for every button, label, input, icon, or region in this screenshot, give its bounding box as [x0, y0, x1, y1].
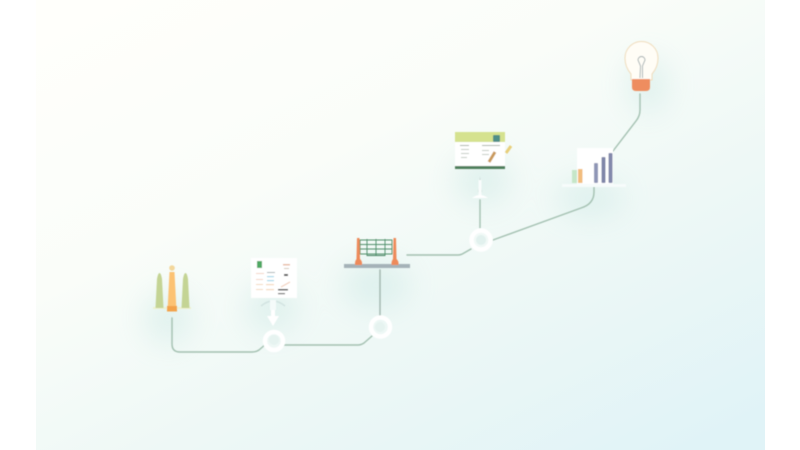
right pillar	[182, 273, 190, 308]
left pillar	[156, 273, 164, 308]
left post	[355, 238, 362, 265]
step 2: document board	[251, 258, 297, 298]
pencil	[489, 152, 495, 162]
shelf	[153, 307, 191, 309]
soft shadows	[144, 57, 668, 344]
step 1: three pillars	[153, 265, 191, 312]
green bar	[572, 170, 577, 183]
node 2	[371, 318, 390, 336]
connecting path	[172, 94, 640, 352]
icon: light bulb	[625, 42, 658, 91]
orange bar	[578, 169, 582, 183]
node 3	[472, 230, 490, 250]
step 2 arrow: down arrow with arc	[261, 300, 285, 326]
bin icon	[493, 135, 500, 142]
center pillar	[168, 272, 176, 311]
grid	[360, 239, 392, 256]
platform	[344, 264, 410, 268]
green tag	[257, 261, 262, 268]
right post	[392, 238, 398, 265]
step 4 arrow: up	[472, 176, 488, 198]
bars	[594, 163, 598, 183]
step 5: bar chart	[562, 148, 626, 187]
node 1	[265, 332, 283, 350]
step 3: table on posts	[344, 238, 410, 268]
shelf	[562, 184, 626, 187]
step 4: document card	[455, 132, 511, 169]
